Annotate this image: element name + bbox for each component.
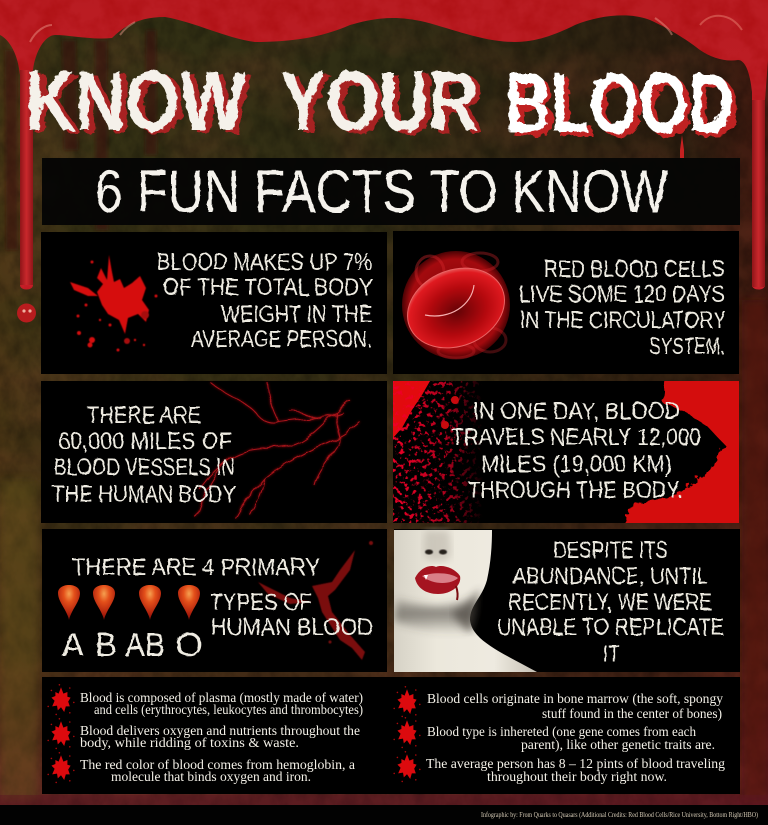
panel: red blood cells — [393, 231, 739, 374]
blood type letters: B — [95, 626, 117, 663]
fact text: IN THE CIRCULATORY — [520, 307, 726, 334]
fact text — [52, 402, 236, 508]
panel: blood vessels — [41, 381, 387, 523]
icon: blood splat — [70, 255, 158, 352]
icon: red blood cell — [395, 251, 517, 362]
fact text: IN ONE DAY, BLOOD — [473, 398, 680, 425]
right column facts: stuff found in the center of bones) — [542, 707, 722, 722]
fact text: THE HUMAN BODY — [52, 481, 236, 508]
fact text: MILES (19,000 KM) — [481, 451, 672, 478]
blood type letters: O — [175, 626, 203, 663]
fact text: AVERAGE PERSON. — [191, 326, 372, 353]
fact text — [451, 398, 701, 504]
fact text — [72, 554, 373, 641]
footer credits — [0, 805, 768, 825]
fact text: TRAVELS NEARLY 12,000 — [451, 424, 701, 451]
icon: four blood drops — [58, 585, 200, 620]
left column facts: The red color of blood comes from hemoglobin, a — [80, 758, 356, 773]
right column facts: The average person has 8 – 12 pints of blood traveling — [426, 757, 725, 772]
fact text: 60,000 MILES OF — [58, 428, 232, 455]
panel: blood types — [42, 529, 387, 672]
title: KNOW — [25, 54, 246, 148]
blood type letters: A — [62, 626, 84, 663]
fact text: BLOOD VESSELS IN — [54, 454, 235, 481]
fact text — [519, 256, 726, 360]
title: YOUR — [286, 57, 484, 151]
fact text: ABUNDANCE, UNTIL — [513, 563, 708, 590]
panel: additional facts — [42, 677, 740, 794]
icon: red veins — [196, 382, 360, 518]
right column facts: throughout their body right now. — [487, 770, 667, 785]
blood type letters: AB — [125, 626, 165, 663]
left column facts: Blood delivers oxygen and nutrients throughout the — [80, 724, 360, 739]
left column facts: molecule that binds oxygen and iron. — [111, 770, 311, 785]
fact text — [497, 537, 724, 668]
left column facts: and cells (erythrocytes, leukocytes and thrombocytes) — [94, 703, 363, 718]
fact text: RED BLOOD CELLS — [544, 256, 725, 283]
title: KNOW — [31, 57, 252, 151]
fact text: TYPES OF — [210, 589, 312, 616]
blood splatter background — [393, 381, 739, 523]
right column facts: parent), like other genetic traits are. — [521, 738, 715, 753]
right column facts — [393, 686, 725, 785]
fact text: THERE ARE — [87, 402, 201, 429]
title: YOUR — [280, 54, 478, 148]
panel: daily blood travel — [393, 381, 739, 523]
title — [25, 54, 739, 154]
right column facts: Blood type is inhereted (one gene comes from each — [427, 725, 696, 740]
fact text: THROUGH THE BODY. — [468, 477, 683, 504]
blood dripping from the top — [0, 0, 768, 322]
fact text: SYSTEM. — [649, 333, 725, 360]
fact text: RECENTLY, WE WERE — [508, 589, 712, 616]
illustration: vampire face — [394, 530, 537, 672]
blood type letters — [62, 626, 203, 663]
fact text — [157, 249, 373, 353]
right column facts: Blood cells originate in bone marrow (the soft, spongy — [427, 692, 723, 707]
fact text: OF THE TOTAL BODY — [163, 274, 373, 301]
fact text: WEIGHT IN THE — [221, 301, 372, 328]
fact text: THERE ARE 4 PRIMARY — [72, 554, 320, 581]
blood splash — [258, 541, 373, 660]
fact text: DESPITE ITS — [553, 537, 668, 564]
fact text: UNABLE TO REPLICATE — [497, 614, 724, 641]
left column facts — [47, 684, 363, 785]
fact text: HUMAN BLOOD — [211, 614, 373, 641]
left column facts: body, while ridding of toxins & waste. — [80, 736, 299, 751]
subtitle banner: 6 FUN FACTS TO KNOW — [95, 158, 668, 225]
fact text: LIVE SOME 120 DAYS — [519, 281, 725, 308]
panel: replicating blood — [394, 529, 740, 672]
left column facts: Blood is composed of plasma (mostly made of water) — [80, 691, 363, 706]
fact text: IT — [603, 641, 620, 668]
panel: blood share of body weight — [41, 232, 387, 374]
fact text: BLOOD MAKES UP 7% — [157, 249, 372, 276]
